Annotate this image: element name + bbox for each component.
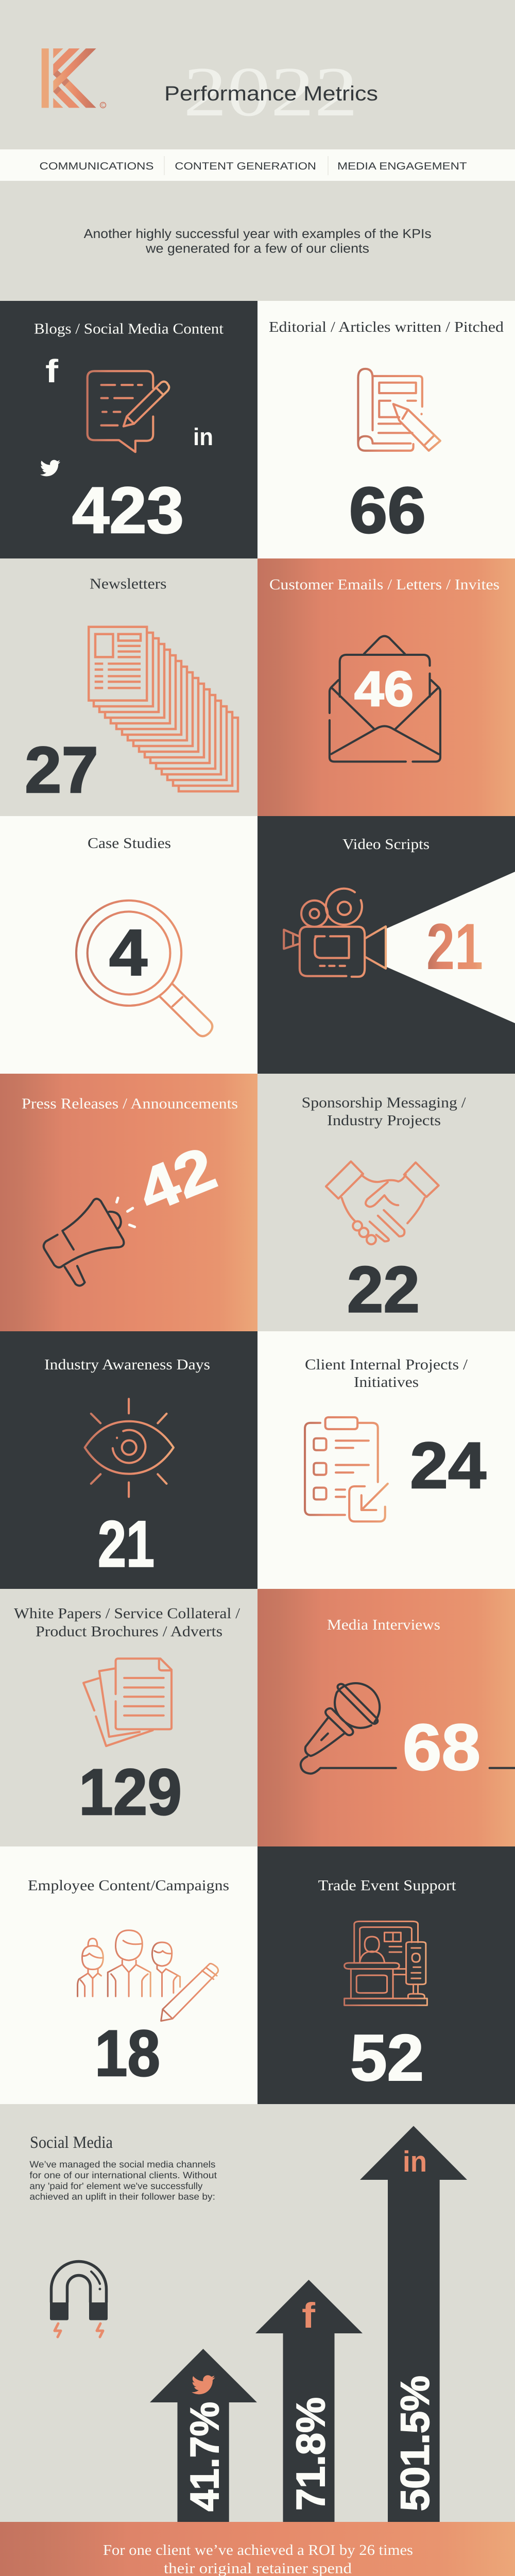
heading: White Papers / Service Collateral / bbox=[14, 1605, 241, 1622]
value: 501.5% bbox=[392, 2376, 438, 2511]
year watermark: 2022 bbox=[183, 53, 358, 131]
sound dashes bbox=[116, 1198, 135, 1227]
panel: video scripts bbox=[258, 816, 515, 1074]
logo: K mark: C bbox=[101, 103, 105, 109]
icon: twitter bird bbox=[192, 2375, 215, 2394]
arrow: linkedin bbox=[360, 2126, 467, 2522]
header bbox=[42, 48, 378, 131]
value: 18 bbox=[95, 2016, 160, 2090]
panel: case studies bbox=[0, 816, 258, 1074]
icon: twitter bbox=[40, 460, 60, 476]
heading: Sponsorship Messaging / bbox=[302, 1095, 467, 1111]
value: 71.8% bbox=[288, 2397, 333, 2511]
icon: open envelope bbox=[330, 636, 440, 761]
arrow: facebook bbox=[255, 2280, 363, 2522]
description: We’ve managed the social media channels bbox=[29, 2159, 215, 2170]
heading: Trade Event Support bbox=[318, 1877, 456, 1894]
service band: COMMUNICATIONS bbox=[39, 161, 153, 172]
icon: film camera bbox=[284, 889, 386, 977]
heading: Video Scripts bbox=[342, 836, 430, 853]
projector beam bbox=[387, 872, 515, 1023]
value: 27 bbox=[25, 733, 98, 806]
icon: exhibition booth bbox=[345, 1921, 427, 2005]
panel: editorial bbox=[258, 301, 515, 558]
value: 21 bbox=[98, 1507, 154, 1581]
value: 129 bbox=[79, 1755, 182, 1828]
heading: Product Brochures / Adverts bbox=[36, 1623, 222, 1640]
panel: white papers bbox=[0, 1589, 258, 1846]
icon: scroll and pencil bbox=[358, 369, 440, 451]
heading: Employee Content/Campaigns bbox=[28, 1877, 229, 1894]
heading bbox=[103, 2542, 413, 2576]
panel: customer emails bbox=[258, 558, 515, 816]
panel: press releases bbox=[0, 1074, 258, 1331]
heading bbox=[14, 1605, 241, 1640]
panel: client projects bbox=[258, 1331, 515, 1589]
icon: linkedin: in bbox=[193, 423, 213, 450]
arrow: twitter bbox=[150, 2349, 257, 2522]
heading: Client Internal Projects / bbox=[305, 1357, 468, 1373]
value: 24 bbox=[410, 1429, 486, 1502]
heading: Press Releases / Announcements bbox=[22, 1096, 238, 1112]
description bbox=[29, 2159, 217, 2202]
heading: Social Media bbox=[30, 2133, 113, 2152]
service band: MEDIA ENGAGEMENT bbox=[337, 161, 467, 172]
panel: ROI bbox=[0, 2522, 515, 2576]
intro text: we generated for a few of our clients bbox=[145, 242, 369, 256]
value: 21 bbox=[426, 910, 483, 983]
panel: awareness days bbox=[0, 1331, 258, 1589]
panel: sponsorship bbox=[258, 1074, 515, 1331]
value: 42 bbox=[129, 1134, 225, 1226]
value: 68 bbox=[403, 1710, 480, 1784]
heading: Industry Projects bbox=[327, 1112, 441, 1129]
icon: facebook: f bbox=[45, 353, 59, 389]
value: 4 bbox=[109, 916, 147, 989]
icon: magnifying glass bbox=[76, 901, 212, 1036]
service band bbox=[0, 149, 515, 181]
heading bbox=[302, 1095, 467, 1129]
heading: Media Interviews bbox=[327, 1617, 440, 1633]
value: 46 bbox=[354, 662, 414, 717]
description: for one of our international clients. Without bbox=[29, 2170, 217, 2180]
icon: facebook f: f bbox=[302, 2296, 316, 2335]
icon: team with pencil bbox=[78, 1930, 218, 2021]
heading bbox=[305, 1357, 468, 1391]
service band: CONTENT GENERATION bbox=[175, 161, 316, 172]
heading: Case Studies bbox=[88, 835, 171, 852]
panel: newsletters bbox=[0, 558, 258, 816]
icon: handshake bbox=[326, 1161, 439, 1244]
value: 41.7% bbox=[182, 2402, 227, 2511]
heading: Industry Awareness Days bbox=[44, 1357, 210, 1373]
logo: K mark bbox=[42, 48, 106, 109]
icon: newsletter stack bbox=[89, 627, 238, 791]
icon: linkedin in: in bbox=[403, 2145, 427, 2178]
heading: Editorial / Articles written / Pitched bbox=[269, 319, 504, 335]
heading: For one client we’ve achieved a ROI by 26 times bbox=[103, 2542, 413, 2558]
icon: microphone bbox=[301, 1683, 515, 1774]
icon: eye bbox=[85, 1399, 174, 1497]
panel: blogs bbox=[0, 301, 258, 558]
title: Performance Metrics bbox=[164, 82, 378, 105]
description: achieved an uplift in their follower base by: bbox=[29, 2192, 215, 2202]
icon: clipboard checklist bbox=[305, 1417, 388, 1521]
icon: documents bbox=[83, 1658, 171, 1746]
panel: trade events bbox=[258, 1846, 515, 2104]
value: 423 bbox=[72, 473, 184, 547]
panel: employee content bbox=[0, 1846, 258, 2104]
icon: speech bubble with pencil bbox=[88, 371, 169, 452]
value: 52 bbox=[350, 2021, 424, 2094]
value: 66 bbox=[349, 473, 426, 547]
intro text: Another highly successful year with examples of the KPIs bbox=[84, 227, 432, 241]
icon: megaphone bbox=[44, 1199, 124, 1286]
description: any 'paid for' element we've successfully bbox=[29, 2181, 202, 2191]
intro text bbox=[84, 227, 432, 256]
heading: Newsletters bbox=[90, 576, 167, 592]
heading: Initiatives bbox=[354, 1374, 419, 1391]
heading: Blogs / Social Media Content bbox=[34, 321, 224, 337]
panel: media interviews bbox=[258, 1589, 515, 1846]
icon: magnet bbox=[50, 2262, 108, 2337]
heading: Customer Emails / Letters / Invites bbox=[269, 577, 500, 593]
value: 22 bbox=[347, 1253, 420, 1326]
panel: social media growth bbox=[0, 2104, 515, 2522]
